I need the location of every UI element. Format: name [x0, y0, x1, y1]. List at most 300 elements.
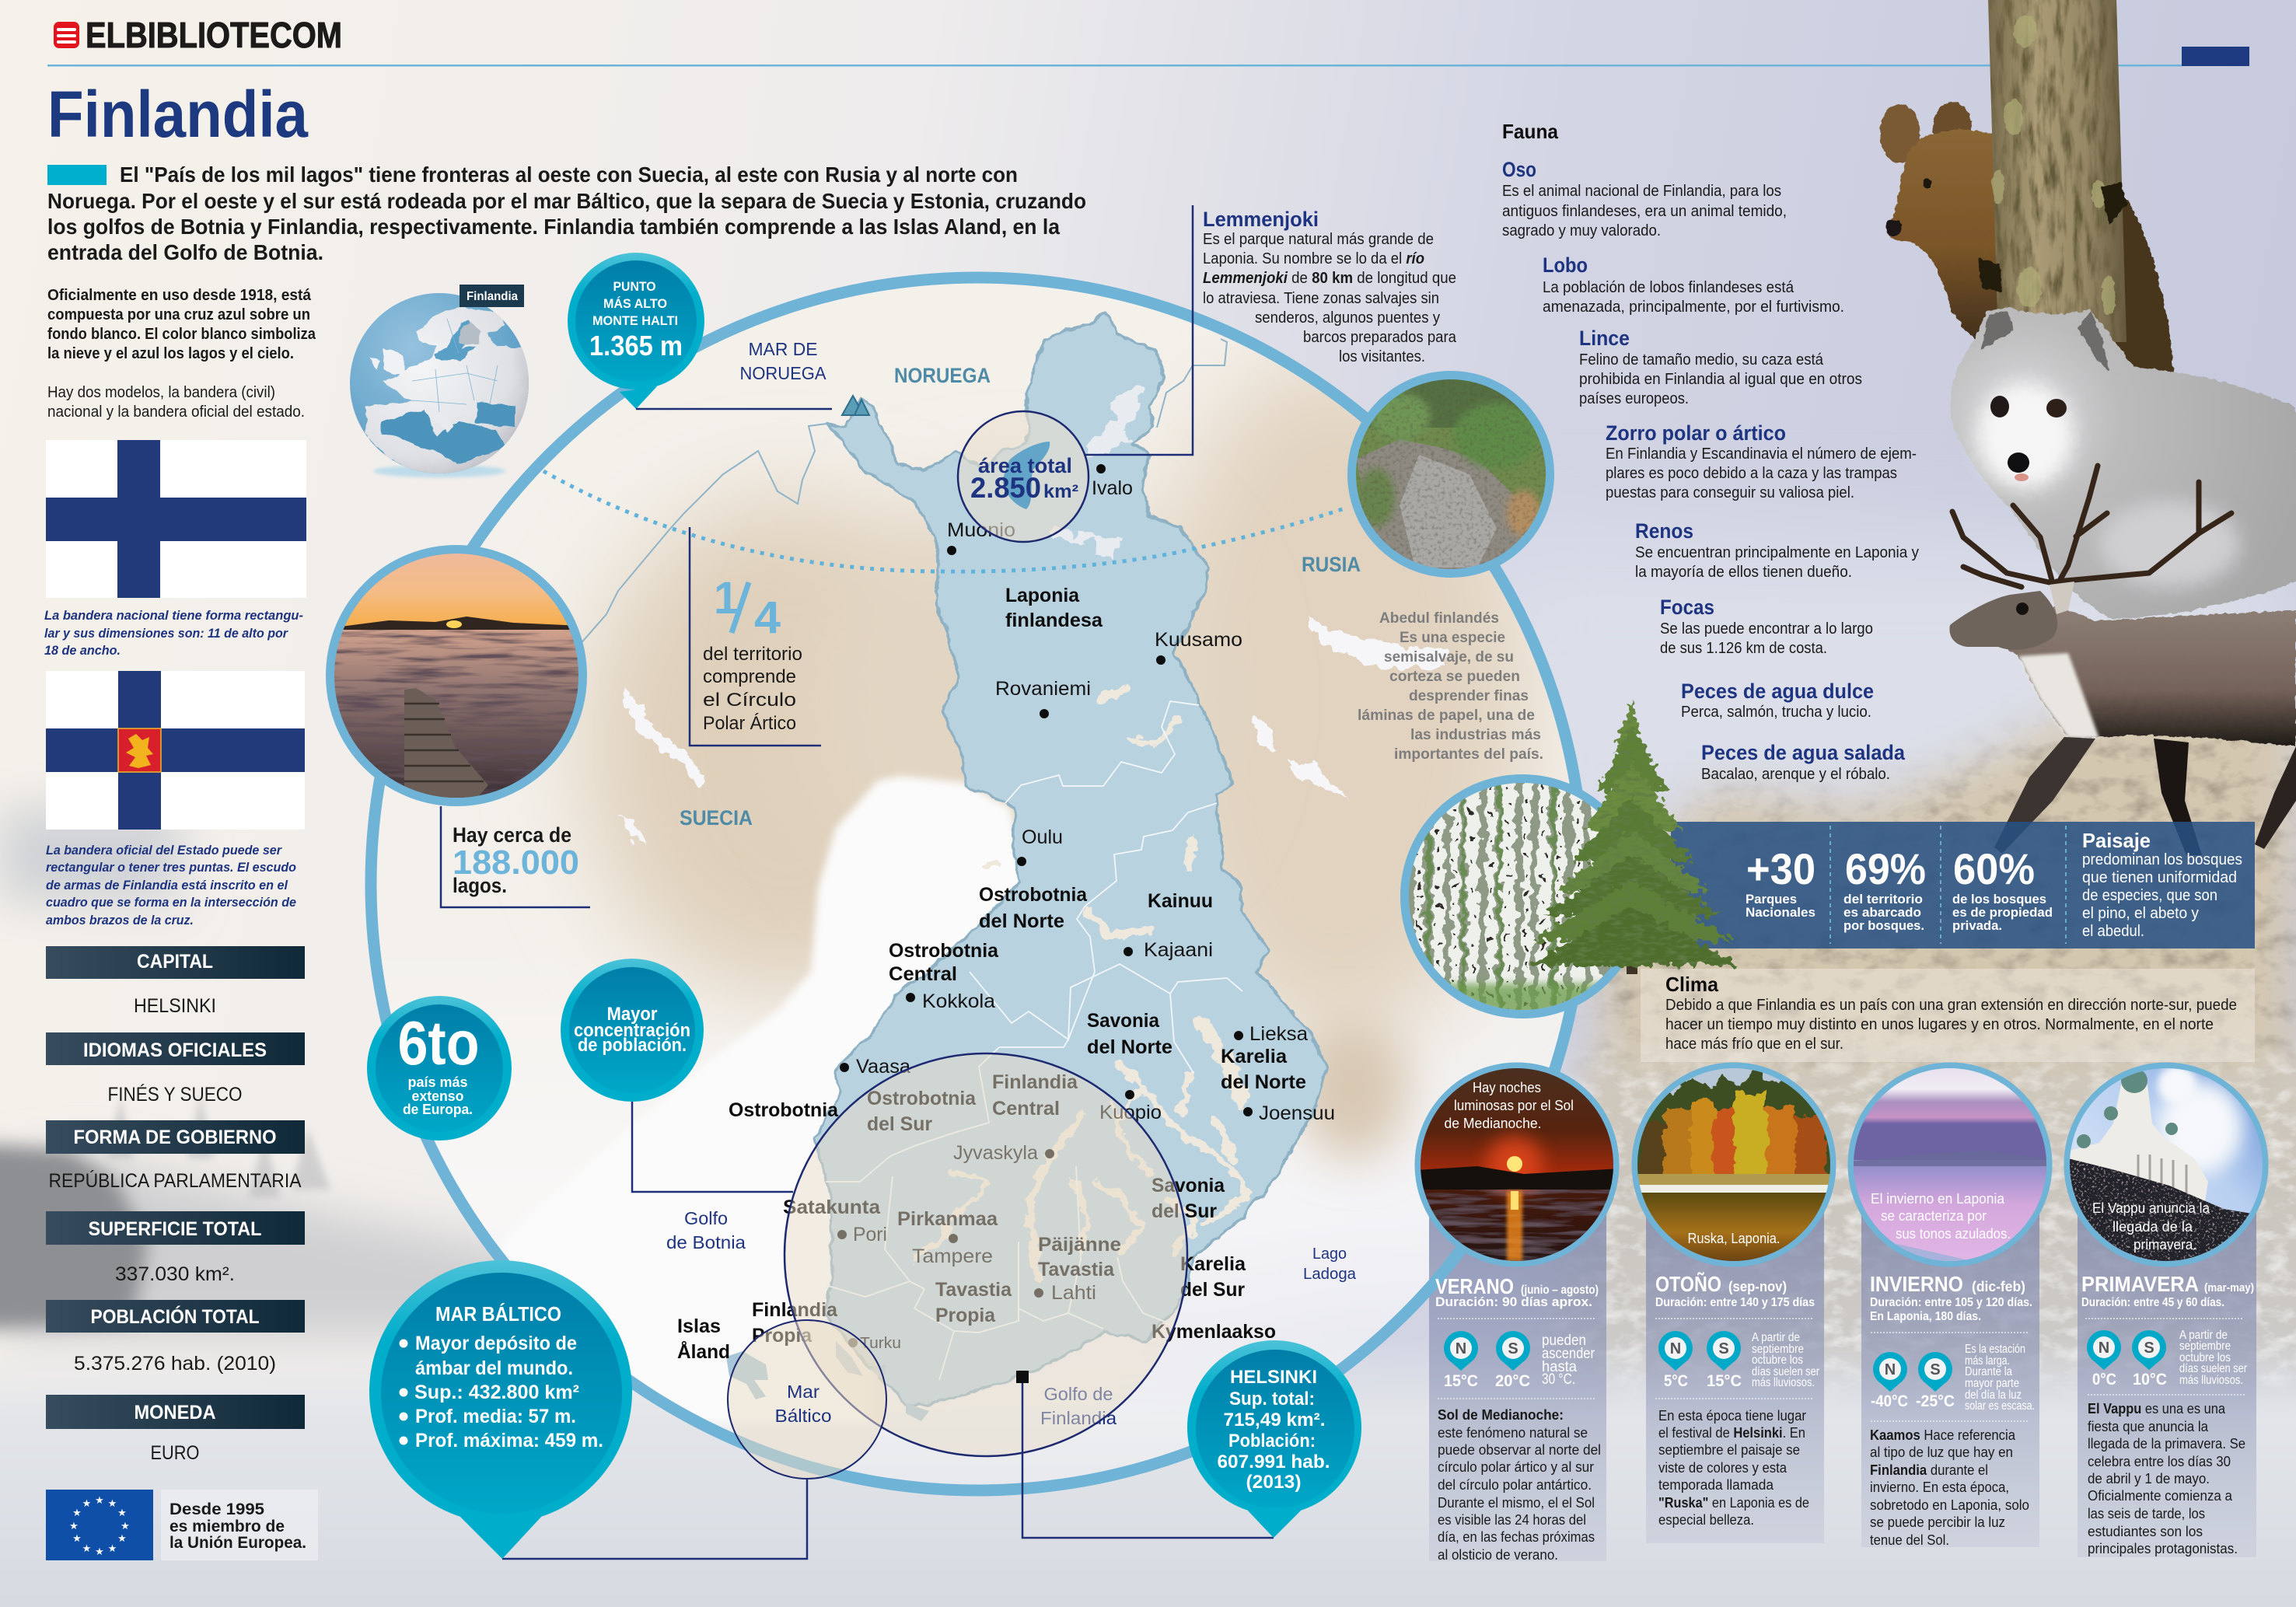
spring temperatures: más lluviosos. — [2179, 1374, 2243, 1387]
autumn text: el festival de Helsinki. En — [1658, 1425, 1805, 1441]
winter temperatures: solar es escasa. — [1965, 1399, 2035, 1413]
fauna: wolf: Lobo — [1543, 253, 1588, 277]
fauna: reindeer: Se encuentran principalmente en Laponia y — [1635, 544, 1919, 561]
european union badge: ★ — [117, 1533, 127, 1545]
photo: Helsinki cathedral — [2067, 1065, 2270, 1271]
flag description text: Oficialmente en uso desde 1918, está — [47, 287, 312, 304]
european union badge: ★ — [82, 1543, 91, 1555]
intro text: entrada del Golfo de Botnia. — [47, 240, 323, 264]
photo: lapland winter: se caracteriza por — [1881, 1208, 1987, 1224]
fauna: wolf: amenazada, principalmente, por el furtivismo. — [1543, 299, 1844, 316]
magnifier: Baltic sea — [728, 1320, 886, 1479]
region labels: Karelia — [1221, 1046, 1288, 1067]
one quarter callout: 4 — [754, 592, 781, 643]
lakes — [914, 383, 1247, 1277]
region labels: Ostrobotnia — [889, 940, 999, 962]
fauna heading: Fauna — [1502, 120, 1558, 143]
spring temperatures: días suelen ser — [2179, 1362, 2247, 1375]
winter temperatures — [1871, 1333, 2035, 1421]
region labels: del Norte — [979, 910, 1064, 932]
summer text — [1438, 1407, 1601, 1563]
summer temperatures: N — [1456, 1340, 1466, 1357]
landscape text: que tienen uniformidad — [2082, 869, 2237, 886]
birch text: láminas de papel, una de — [1358, 707, 1535, 724]
caption: national flag: 18 de ancho. — [44, 643, 121, 658]
stat: forest share: 69% — [1845, 844, 1926, 893]
lemmenjoki text: los visitantes. — [1339, 348, 1425, 365]
photo: lapland winter: El invierno en Laponia — [1871, 1191, 2005, 1207]
winter heading: Duración: entre 105 y 120 días. — [1870, 1296, 2032, 1309]
region labels: del Sur — [867, 1113, 932, 1135]
spring heading: (mar-may) — [2204, 1281, 2254, 1294]
summer temperatures: hasta — [1542, 1359, 1577, 1375]
city labels: Kokkola — [922, 990, 995, 1012]
photo: ruska forest: Ruska, Laponia. — [1687, 1231, 1781, 1246]
pin: sixth largest — [367, 996, 512, 1141]
logo: ELBIBLIOTECOM — [86, 15, 342, 55]
city labels: Kajaani — [1144, 939, 1213, 961]
landscape text: de especies, que son — [2082, 887, 2217, 904]
fauna: seals: de sus 1.126 km de costa. — [1660, 640, 1827, 657]
winter text: invierno. En esta época, — [1870, 1479, 2009, 1495]
city labels: Pori — [853, 1224, 887, 1245]
currency: EURO — [151, 1442, 199, 1464]
sea labels: MAR DE — [748, 339, 818, 359]
autumn text: viste de colores y esta — [1658, 1460, 1788, 1476]
sea labels: Golfo — [684, 1208, 728, 1228]
landscape text: predominan los bosques — [2082, 851, 2242, 868]
pin: punto más alto: MÁS ALTO — [603, 296, 667, 311]
spring text: llegada de la primavera. Se — [2088, 1436, 2245, 1452]
region labels: Karelia — [1180, 1253, 1246, 1275]
clima panel: Debido a que Finlandia es un país con una gran extensión en dirección norte-sur, puede — [1665, 997, 2237, 1014]
stat: national parks: +30 — [1746, 844, 1815, 893]
country labels: NORUEGA — [894, 364, 991, 387]
birch text — [1358, 610, 1543, 763]
bear — [1880, 102, 2173, 372]
fauna: bear: sagrado y muy valorado. — [1502, 222, 1661, 239]
icon: globe with tooltip — [350, 285, 536, 478]
winter text: Kaamos Hace referencia — [1870, 1427, 2016, 1443]
arctic fox — [1951, 309, 2296, 618]
Finland landmass — [816, 313, 1326, 1404]
winter text: Finlandia durante el — [1870, 1462, 1988, 1478]
mountain icon — [842, 396, 869, 415]
capital: HELSINKI — [134, 995, 216, 1017]
flag description text: nacional y la bandera oficial del estado. — [47, 403, 305, 421]
stat: national parks: Parques — [1746, 892, 1797, 907]
stat: national parks — [1746, 844, 1815, 920]
region labels — [677, 585, 1306, 1363]
autumn temperatures: S — [1718, 1340, 1729, 1357]
pin: Helsinki — [1187, 1340, 1361, 1538]
spring temperatures: A partir de — [2179, 1329, 2228, 1342]
photo: lapland winter: sus tonos azulados. — [1896, 1226, 2011, 1242]
photo: Helsinki cathedral: primavera. — [2133, 1237, 2196, 1252]
region borders — [826, 701, 1242, 1380]
region labels: Savonia — [1151, 1175, 1225, 1197]
spring text: El Vappu es una es una — [2088, 1401, 2226, 1417]
spring text: las seis de tarde, los — [2088, 1506, 2205, 1521]
flag: state with coat of arms — [46, 671, 305, 830]
spring text: de abril y 1 de mayo. — [2088, 1471, 2210, 1486]
sea labels: NORUEGA — [740, 363, 826, 383]
summer text: es visible las 24 horas del — [1438, 1512, 1586, 1528]
caption: state flag: cuadro que se forma en la intersección de — [46, 895, 296, 910]
winter text: tenue del Sol. — [1870, 1532, 1949, 1548]
reindeer — [1949, 466, 2296, 855]
autumn heading: Duración: entre 140 y 175 días — [1655, 1296, 1815, 1309]
summer temperatures: 20°C — [1495, 1372, 1530, 1390]
photo: Helsinki cathedral: El Vappu anuncia la — [2092, 1200, 2210, 1216]
caption: national flag: La bandera nacional tiene forma rectangu- — [44, 608, 303, 623]
region labels: Kymenlaakso — [1151, 1321, 1276, 1343]
winter heading: En Laponia, 180 días. — [1870, 1310, 1981, 1323]
spring text: estudiantes son los — [2088, 1524, 2203, 1539]
lemmenjoki text: senderos, algunos puentes y — [1255, 309, 1440, 327]
winter temperatures: Es la estación — [1965, 1343, 2025, 1356]
photo: midnight sun: luminosas por el Sol — [1454, 1098, 1574, 1113]
spring text: fiesta que anuncia la — [2088, 1419, 2209, 1434]
spring text: celebra entre los días 30 — [2088, 1454, 2231, 1469]
fauna: reindeer — [1635, 519, 1919, 581]
government: REPÚBLICA PARLAMENTARIA — [48, 1169, 302, 1192]
one quarter callout: el Círculo — [703, 690, 796, 711]
summer temperatures — [1438, 1319, 1595, 1399]
lemmenjoki text: Laponia. Su nombre se lo da el río — [1203, 250, 1424, 267]
flag description text: la nieve y el azul los lagos y el cielo. — [47, 345, 294, 362]
fauna: lynx: Felino de tamaño medio, su caza está — [1579, 351, 1824, 369]
stat: private forests — [1952, 844, 2053, 933]
region labels: Ostrobotnia — [729, 1099, 839, 1121]
region labels: Ostrobotnia — [979, 884, 1088, 906]
birch text: Abedul finlandés — [1379, 610, 1499, 627]
stat: private forests: de los bosques — [1952, 892, 2046, 907]
season: summer — [1415, 1065, 1621, 1563]
landscape text: Paisaje — [2082, 829, 2151, 852]
summer text: Durante el mismo, el el Sol — [1438, 1495, 1595, 1511]
spring temperatures: 0°C — [2092, 1371, 2116, 1389]
fauna: saltwater fish — [1701, 741, 1906, 783]
city labels: Joensuu — [1259, 1102, 1335, 1124]
fauna: arctic fox — [1606, 421, 1917, 501]
photo: midnight sun — [1415, 1065, 1621, 1267]
icon: spruce tree — [1528, 700, 1739, 974]
stat: private forests: privada. — [1952, 918, 2002, 933]
pin: sixth largest: de Europa. — [403, 1102, 473, 1117]
region labels: Åland — [677, 1340, 730, 1363]
spring temperatures: S — [2144, 1340, 2154, 1357]
spring temperatures — [2085, 1319, 2247, 1395]
callout: lakes: Hay cerca de — [453, 823, 571, 847]
autumn temperatures — [1655, 1319, 1819, 1399]
fauna: arctic fox: plares es poco debido a la caza y las trampas — [1606, 465, 1897, 482]
region labels: Savonia — [1087, 1010, 1160, 1032]
stats band — [1671, 822, 2255, 948]
summer heading: (junio – agosto) — [1521, 1284, 1599, 1297]
tree trunk — [1977, 0, 2127, 342]
european union badge: ★ — [72, 1533, 82, 1545]
summer text: del círculo polar antártico. — [1438, 1477, 1592, 1493]
spring temperatures: N — [2099, 1340, 2109, 1357]
european union badge: ★ — [82, 1498, 91, 1510]
city labels: Muonio — [947, 519, 1015, 541]
region labels: Ostrobotnia — [867, 1088, 977, 1109]
pin: sixth largest: país más — [407, 1074, 468, 1090]
autumn text: "Ruska" en Laponia es de — [1658, 1495, 1809, 1511]
region labels: del Norte — [1221, 1071, 1306, 1093]
intro text: los golfos de Botnia y Finlandia, respectivamente. Finlandia también comprende a las Islas Aland, en la — [47, 215, 1060, 239]
fauna: freshwater fish: Perca, salmón, trucha y lucio. — [1681, 704, 1871, 721]
season: autumn — [1625, 1065, 1847, 1528]
autumn temperatures: 5°C — [1664, 1372, 1688, 1390]
population: POBLACIÓN TOTAL — [90, 1305, 260, 1328]
summer temperatures: ascender — [1542, 1346, 1595, 1362]
pin: Baltic sea: ámbar del mundo. — [415, 1357, 573, 1379]
city labels: Vaasa — [856, 1056, 910, 1078]
caption: state flag: La bandera oficial del Estado puede ser — [46, 843, 282, 858]
summer text: este fenómeno natural se — [1438, 1425, 1588, 1441]
birch text: Es una especie — [1400, 629, 1505, 646]
lemmenjoki text: Es el parque natural más grande de — [1203, 231, 1434, 248]
winter text — [1870, 1427, 2029, 1548]
pin: Helsinki: HELSINKI — [1230, 1367, 1317, 1388]
fauna: saltwater fish: Peces de agua salada — [1701, 741, 1906, 764]
winter heading: (dic-feb) — [1972, 1279, 2025, 1294]
fauna: wolf — [1543, 253, 1844, 316]
summer temperatures: pueden — [1542, 1333, 1586, 1349]
sea labels: Finlandia — [1040, 1408, 1117, 1428]
summer text: día, en las fechas próximas — [1438, 1529, 1595, 1545]
spring heading — [2081, 1272, 2254, 1309]
region labels: Tavastia — [1038, 1259, 1115, 1280]
spring text: Oficialmente comienza a — [2088, 1488, 2233, 1504]
region labels: Laponia — [1005, 585, 1080, 606]
fauna: freshwater fish — [1681, 679, 1874, 721]
country labels: SUECIA — [680, 806, 753, 830]
winter heading — [1870, 1272, 2032, 1323]
region labels: Tavastia — [935, 1279, 1012, 1301]
autumn text: temporada llamada — [1658, 1477, 1774, 1493]
one quarter callout: comprende — [703, 666, 796, 687]
flag description text: fondo blanco. El color blanco simboliza — [47, 326, 316, 343]
swedish and russian lakes — [620, 618, 1446, 846]
autumn text: En esta época tiene lugar — [1658, 1408, 1806, 1424]
fauna: lynx: países europeos. — [1579, 390, 1689, 407]
official languages — [46, 1032, 305, 1106]
winter temperatures: Durante la — [1965, 1365, 2012, 1378]
map background inside ring — [371, 278, 1584, 1490]
stat: private forests: 60% — [1953, 844, 2035, 893]
summer text: al olsticio de verano. — [1438, 1547, 1558, 1563]
big ring around map — [371, 278, 1584, 1490]
population: 5.375.276 hab. (2010) — [74, 1353, 276, 1375]
fauna: arctic fox: puestas para conseguir su valiosa piel. — [1606, 484, 1854, 501]
header rule and corner tab — [47, 47, 2249, 67]
flag description text: compuesta por una cruz azul sobre un — [47, 306, 310, 323]
fauna: reindeer: Renos — [1635, 519, 1693, 543]
sea labels: de Botnia — [666, 1232, 746, 1252]
arctic circle — [543, 471, 1344, 571]
fact list — [46, 946, 305, 1464]
european union badge: ★ — [72, 1507, 82, 1519]
european union badge: ★ — [108, 1498, 117, 1510]
fauna: seals: Focas — [1660, 596, 1714, 619]
government — [46, 1120, 305, 1192]
country labels — [680, 364, 1361, 830]
intro text — [47, 162, 1086, 264]
spring text: principales protagonistas. — [2088, 1541, 2238, 1556]
pin: Helsinki: 607.991 hab. — [1218, 1452, 1330, 1473]
pin: Baltic sea: Prof. máxima: 459 m. — [415, 1430, 603, 1452]
city labels: Kuusamo — [1155, 629, 1242, 651]
region labels: del Sur — [1180, 1279, 1245, 1301]
flag: national — [46, 440, 306, 598]
magnifier: south Finland — [785, 1053, 1187, 1456]
city labels: Tampere — [912, 1245, 993, 1267]
winter temperatures: -25°C — [1916, 1392, 1955, 1410]
summer heading: VERANO — [1435, 1274, 1514, 1298]
caption: state flag: ambos brazos de la cruz. — [46, 913, 194, 928]
pin: punto más alto: MONTE HALTI — [592, 314, 678, 328]
lemmenjoki text: barcos preparados para — [1303, 329, 1457, 346]
autumn heading: OTOÑO — [1655, 1272, 1721, 1296]
european union badge: ★ — [117, 1507, 127, 1519]
summer text: círculo polar ártico y al sur — [1438, 1459, 1594, 1475]
pin: Helsinki: (2013) — [1246, 1472, 1302, 1493]
magnifier: Inari lake area: 2.850 — [970, 472, 1041, 504]
photo: birch forest — [1403, 766, 1640, 1030]
one quarter callout: 1 — [714, 573, 739, 624]
stat: national parks: Nacionales — [1746, 905, 1815, 920]
city labels: Lahti — [1051, 1282, 1096, 1304]
winter text: al tipo de luz que hay en — [1870, 1445, 2013, 1460]
winter temperatures: -40°C — [1871, 1392, 1908, 1410]
stat: forest share: es abarcado — [1843, 905, 1921, 920]
fauna: bear: Es el animal nacional de Finlandia, para los — [1502, 183, 1781, 200]
official languages: FINÉS Y SUECO — [107, 1083, 243, 1106]
pin: Baltic sea: Sup.: 432.800 km² — [414, 1382, 579, 1403]
lemmenjoki text: Lemmenjoki de 80 km de longitud que — [1203, 270, 1456, 287]
autumn temperatures: octubre los — [1752, 1354, 1803, 1367]
european union badge: ★ — [121, 1521, 130, 1532]
autumn heading: (sep-nov) — [1728, 1279, 1787, 1294]
european union badge: ★ — [108, 1543, 117, 1555]
autumn temperatures: 15°C — [1707, 1372, 1742, 1390]
fauna: bear: antiguos finlandeses, era un animal temido, — [1502, 203, 1787, 220]
region labels: Satakunta — [783, 1197, 881, 1218]
region labels: Central — [992, 1098, 1060, 1120]
summer temperatures: 15°C — [1444, 1372, 1478, 1390]
baltic label: Báltico — [774, 1406, 832, 1426]
one quarter callout — [703, 573, 802, 734]
winter text: se puede percibir la luz — [1870, 1514, 2005, 1530]
fauna: seals — [1660, 596, 1873, 657]
region labels: Päijänne — [1038, 1234, 1121, 1256]
region labels: Pirkanmaa — [897, 1208, 998, 1230]
birch text: importantes del país. — [1394, 746, 1543, 763]
season panels — [1429, 1166, 2256, 1561]
birch text: las industrias más — [1410, 726, 1541, 743]
lemmenjoki text: Lemmenjoki — [1203, 208, 1319, 231]
region labels: del Norte — [1087, 1036, 1172, 1058]
intro text: El "País de los mil lagos" tiene fronteras al oeste con Suecia, al este con Rusia y al norte con — [120, 162, 1018, 187]
autumn temperatures: septiembre — [1752, 1343, 1804, 1356]
one quarter callout: del territorio — [703, 644, 802, 665]
pin: Baltic sea: MAR BÁLTICO — [435, 1302, 561, 1326]
sea labels: Golfo de — [1043, 1384, 1113, 1404]
area: 337.030 km². — [115, 1263, 235, 1285]
summer text: Sol de Medianoche: — [1438, 1407, 1564, 1423]
european union badge: es miembro de — [169, 1518, 285, 1535]
spring heading: PRIMAVERA — [2081, 1272, 2199, 1296]
autumn text — [1658, 1408, 1809, 1528]
city labels — [853, 477, 1335, 1352]
intro text: Noruega. Por el oeste y el sur está rodeada por el mar Báltico, que la separa de Suecia y Estonia, cruzando — [47, 189, 1086, 213]
fox face — [1990, 396, 2067, 481]
currency: MONEDA — [134, 1402, 216, 1424]
spring temperatures: octubre los — [2179, 1351, 2231, 1364]
Åland islands and archipelago — [726, 1341, 929, 1421]
stat: forest share — [1843, 844, 1926, 933]
clima panel — [1641, 969, 2255, 1062]
one quarter callout: Polar Ártico — [703, 713, 796, 734]
stat: forest share: del territorio — [1843, 892, 1923, 907]
birch text: corteza se pueden — [1389, 668, 1520, 685]
european union badge: la Unión Europea. — [169, 1534, 306, 1552]
magnifier: Inari lake area — [958, 411, 1089, 542]
country labels: RUSIA — [1302, 553, 1361, 576]
spring heading: Duración: entre 45 y 60 días. — [2081, 1296, 2224, 1309]
city labels: Ivalo — [1092, 477, 1133, 499]
photo: lake at sunset with pier — [327, 544, 591, 812]
magnifier: Inari lake area: km² — [1043, 481, 1078, 502]
capital — [46, 946, 305, 1017]
fauna: arctic fox: Zorro polar o ártico — [1606, 421, 1786, 445]
area — [46, 1211, 305, 1285]
magnifier: Inari lake area: área total — [978, 454, 1072, 477]
title: Finlandia — [47, 78, 309, 151]
winter temperatures: del día la luz — [1965, 1389, 2022, 1402]
city labels: Oulu — [1022, 826, 1063, 848]
european union badge: ★ — [95, 1546, 104, 1558]
clima panel: Clima — [1665, 973, 1719, 996]
autumn temperatures: más lluviosos. — [1752, 1376, 1815, 1389]
european union badge: ★ — [69, 1521, 79, 1532]
pin: punto más alto: 1.365 m — [589, 330, 683, 362]
city labels: Lieksa — [1249, 1023, 1308, 1045]
baltic label — [774, 1382, 832, 1426]
pin: population concentration: de población. — [578, 1035, 687, 1056]
stat: private forests: es de propiedad — [1952, 905, 2053, 920]
helsinki marker — [1016, 1371, 1029, 1383]
gulf of Bothnia sea — [498, 776, 1026, 1423]
pin: punto más alto — [568, 253, 704, 409]
photo: midnight sun: Hay noches — [1473, 1080, 1541, 1095]
city labels: Rovaniemi — [995, 678, 1091, 700]
animals: bear, trunk, fox, reindeer — [1880, 0, 2296, 855]
european union badge: ★ — [95, 1495, 104, 1507]
pin: punto más alto: PUNTO — [613, 280, 656, 294]
pin: Helsinki: 715,49 km². — [1224, 1410, 1325, 1431]
pin: Helsinki: Población: — [1228, 1431, 1316, 1452]
fauna: seals: Se las puede encontrar a lo largo — [1660, 620, 1873, 638]
sea labels: Lago — [1312, 1245, 1347, 1263]
photo: Lemmenjoki stream — [1352, 373, 1550, 579]
clima panel: hace más frío que en el sur. — [1665, 1036, 1843, 1053]
region labels: del Sur — [1151, 1200, 1217, 1222]
currency — [46, 1395, 305, 1464]
